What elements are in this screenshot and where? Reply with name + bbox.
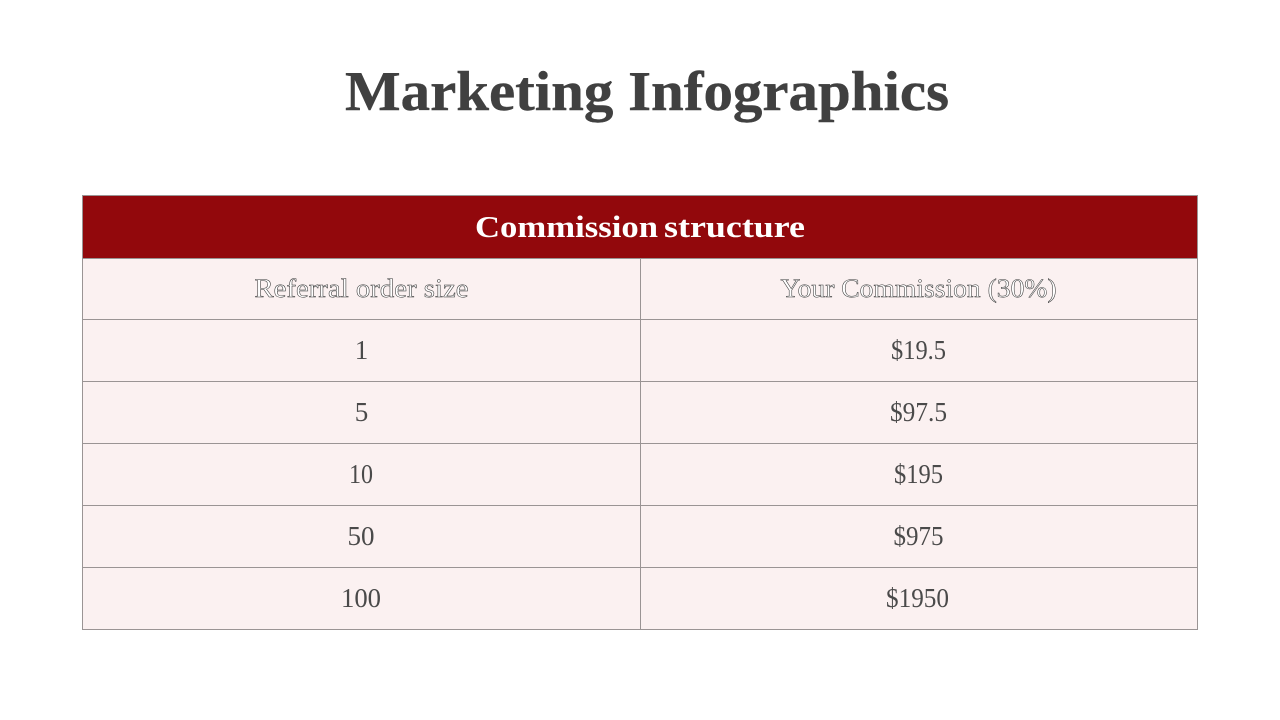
table header band (82, 196, 1198, 258)
row 2 order size: 5 (355, 397, 368, 427)
row 4 commission: $975 (894, 521, 944, 551)
table heading (475, 209, 805, 244)
title: Marketing Infographics (345, 61, 949, 123)
row 1 commission: $19.5 (891, 335, 946, 365)
row 2 commission: $97.5 (890, 397, 947, 427)
row 5 order size: 100 (341, 583, 381, 613)
row 1 order size: 1 (355, 335, 368, 365)
row 3 commission: $195 (894, 459, 943, 489)
table heading: structure (664, 209, 805, 244)
row 4 order size: 50 (348, 521, 374, 551)
column header: your commission: Your Commission (30%) (780, 274, 1056, 303)
row 3 order size: 10 (349, 459, 373, 489)
row 5 commission: $1950 (886, 583, 949, 613)
commission table (82, 196, 1198, 630)
column header: referral order size: Referral order size (254, 274, 468, 303)
table body background (82, 258, 1198, 630)
table heading: Commission (475, 209, 658, 244)
